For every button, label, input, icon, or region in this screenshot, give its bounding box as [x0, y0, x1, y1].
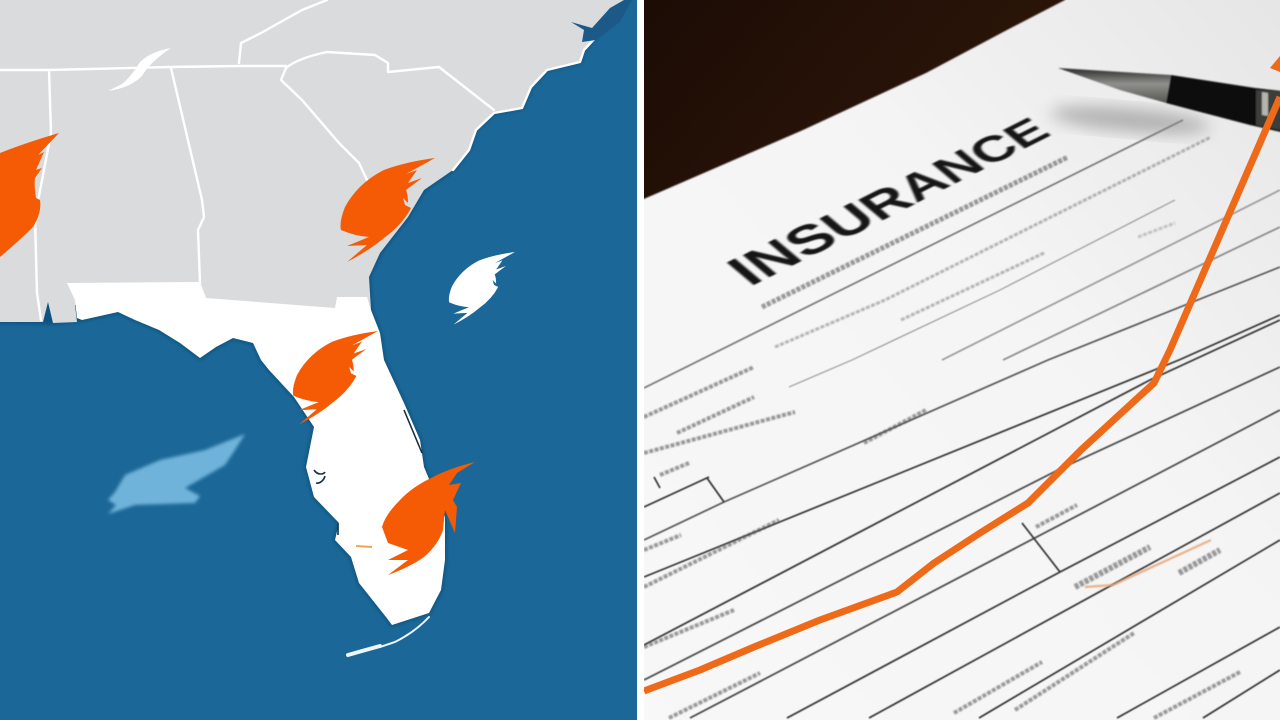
icon: small orange fleck in south Florida [356, 546, 372, 547]
dark wood table [644, 0, 1066, 200]
map: state borders [0, 0, 612, 320]
map: Florida Keys [348, 617, 429, 655]
map: Indian River and Gulf coast inlet marks [314, 410, 422, 535]
heading printed on the form: INSURANCE [715, 105, 1061, 294]
form rule lines [644, 120, 1280, 718]
icon: orange hurricane, Georgia coast [340, 158, 435, 262]
pen shadow [1049, 101, 1211, 139]
icon: orange hurricane, Mississippi edge [0, 133, 59, 257]
panel: insurance document photo [630, 0, 1280, 720]
panel: hurricane map of the southeastern US [0, 0, 637, 720]
rising orange trend line [644, 97, 1280, 691]
icon: white hurricane offshore [449, 252, 515, 325]
faint orange mark on the form [1085, 540, 1211, 587]
illegible small print on the form [644, 137, 1240, 718]
map: gray southeastern states [0, 0, 624, 323]
arrow tip of trend line [1270, 56, 1280, 72]
icon: pale blue storm in the Gulf [108, 434, 245, 514]
map: Florida highlighted in white [67, 282, 445, 625]
icon: white storm over Alabama [108, 48, 171, 91]
map: Chesapeake inlet [571, 0, 632, 42]
icon: pen [1058, 68, 1280, 134]
icon: orange hurricane, north Florida [293, 331, 378, 425]
insurance form paper [630, 0, 1280, 720]
icon: orange hurricane, south Florida [382, 462, 475, 575]
